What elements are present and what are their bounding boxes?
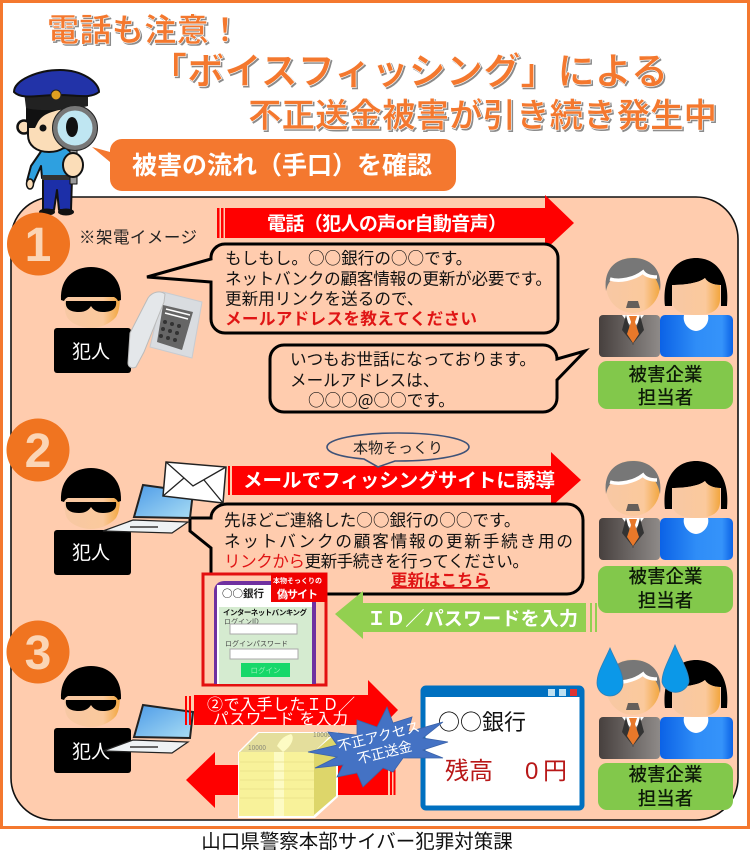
- icon: envelope: [163, 462, 226, 503]
- heading callout: 被害の流れ（手口）を確認: [132, 146, 432, 182]
- bank window: [421, 686, 584, 808]
- arrow: use stolen ID: ②で入手したＩＤ／: [207, 691, 355, 715]
- victims 2: 被害企業: [628, 563, 703, 589]
- arrow: phone call: 電話（犯人の声or自動音声）: [267, 209, 507, 236]
- criminal 3: [54, 666, 131, 773]
- callout: unauthorized access starburst: [308, 707, 448, 787]
- arrow: use stolen ID: [185, 680, 398, 741]
- victims 1: 被害企業: [628, 361, 703, 387]
- icon: police officer with magnifier: [14, 70, 99, 216]
- label: looks genuine: 本物そっくり: [353, 437, 443, 458]
- panel: flow background: [11, 197, 738, 820]
- criminal 2: [54, 468, 131, 575]
- bubble: phishing mail: 更新はこちら: [391, 567, 490, 591]
- bubble: caller speech: 更新用リンクを送るので、: [225, 286, 423, 310]
- bubble: caller speech: メールアドレスを教えてください: [225, 306, 477, 330]
- label: looks genuine: [327, 433, 469, 467]
- step 1 number badge: 1: [25, 219, 51, 272]
- bubble: victim reply: メールアドレスは、: [290, 367, 439, 391]
- arrow: mail lure: メールでフィッシングサイトに誘導: [243, 464, 555, 493]
- icon: laptop 2: [103, 485, 193, 533]
- title: 電話も注意！: [47, 5, 241, 51]
- criminal 1: [54, 267, 131, 373]
- callout: unauthorized access starburst: 不正アクセス: [335, 716, 422, 756]
- label: fake site: 本物そっくりの: [273, 576, 322, 586]
- fake site: ○○銀行: [222, 586, 264, 601]
- note: call image: ※架電イメージ: [79, 224, 197, 248]
- icon: telephone: [128, 292, 202, 368]
- fake site: ログインID: [224, 617, 259, 627]
- footer: 山口県警察本部サイバー犯罪対策課: [201, 825, 513, 854]
- step 2 number badge: 2: [25, 425, 51, 478]
- victims 2: [598, 460, 733, 613]
- bubble: phishing mail: [190, 504, 583, 594]
- icon: cash stack: 10000: [313, 729, 331, 739]
- icon: cash stack: [238, 729, 338, 818]
- bubble: phishing mail: ネットバンクの顧客情報の更新手続き用の: [224, 528, 573, 552]
- victims 1: 担当者: [638, 384, 693, 410]
- victims 3: 被害企業: [628, 761, 703, 787]
- step 1 number badge: [7, 212, 70, 276]
- bubble: victim reply: ○○○@○○です。: [308, 387, 455, 411]
- label: fake site: [271, 573, 327, 602]
- title: 不正送金被害が引き続き発生中: [248, 88, 717, 137]
- bubble: phishing mail: 先ほどご連絡した○○銀行の○○です。: [224, 507, 521, 531]
- icon: cash stack: 10000: [248, 742, 266, 752]
- criminal 1: 犯人: [72, 337, 110, 364]
- step 2 number badge: [6, 418, 70, 482]
- bank window: 残高: [445, 751, 493, 786]
- victims 3: 担当者: [638, 785, 693, 811]
- bubble: victim reply: いつもお世話になっております。: [290, 346, 536, 370]
- fake site: インターネットバンキング: [223, 607, 308, 618]
- fake site: [203, 573, 327, 685]
- callout: unauthorized access starburst: 不正送金: [355, 736, 414, 769]
- bank window: ○○銀行: [438, 705, 526, 737]
- criminal 3: 犯人: [72, 737, 110, 764]
- step 3 number badge: [6, 620, 70, 684]
- bubble: caller speech: ネットバンクの顧客情報の更新が必要です。: [225, 266, 552, 290]
- arrow: mail lure: [228, 452, 581, 507]
- victims 2: 担当者: [638, 587, 693, 613]
- arrow: enter ID and password: ＩＤ／パスワードを入力: [367, 604, 578, 631]
- title: [47, 5, 717, 137]
- arrow: phone call: [217, 195, 574, 250]
- step 3 number badge: 3: [25, 627, 51, 680]
- criminal 2: 犯人: [72, 538, 110, 565]
- bubble: caller speech: もしもし。○○銀行の○○です。: [225, 245, 472, 269]
- arrow: use stolen ID: パスワード を入力: [213, 707, 348, 729]
- title: 「ボイスフィッシング」による: [150, 41, 668, 95]
- victims 1: [598, 257, 733, 410]
- bubble: phishing mail: リンクから更新手続きを行ってください。: [224, 548, 529, 572]
- bank window: 0: [525, 758, 538, 785]
- bank window: 円: [543, 751, 567, 786]
- label: fake site: 偽サイト: [277, 586, 318, 602]
- icon: sweat drops: [597, 645, 689, 696]
- arrow: enter ID and password: [335, 591, 597, 639]
- heading callout: [92, 139, 456, 191]
- arrow: money transfer: [186, 752, 396, 808]
- fake site: ログインパスワード: [225, 639, 288, 649]
- victims 3: [598, 659, 733, 811]
- bubble: caller speech: [147, 244, 558, 333]
- fake site: ログイン: [250, 665, 280, 676]
- icon: laptop 3: [103, 705, 193, 753]
- bubble: victim reply: [270, 345, 585, 412]
